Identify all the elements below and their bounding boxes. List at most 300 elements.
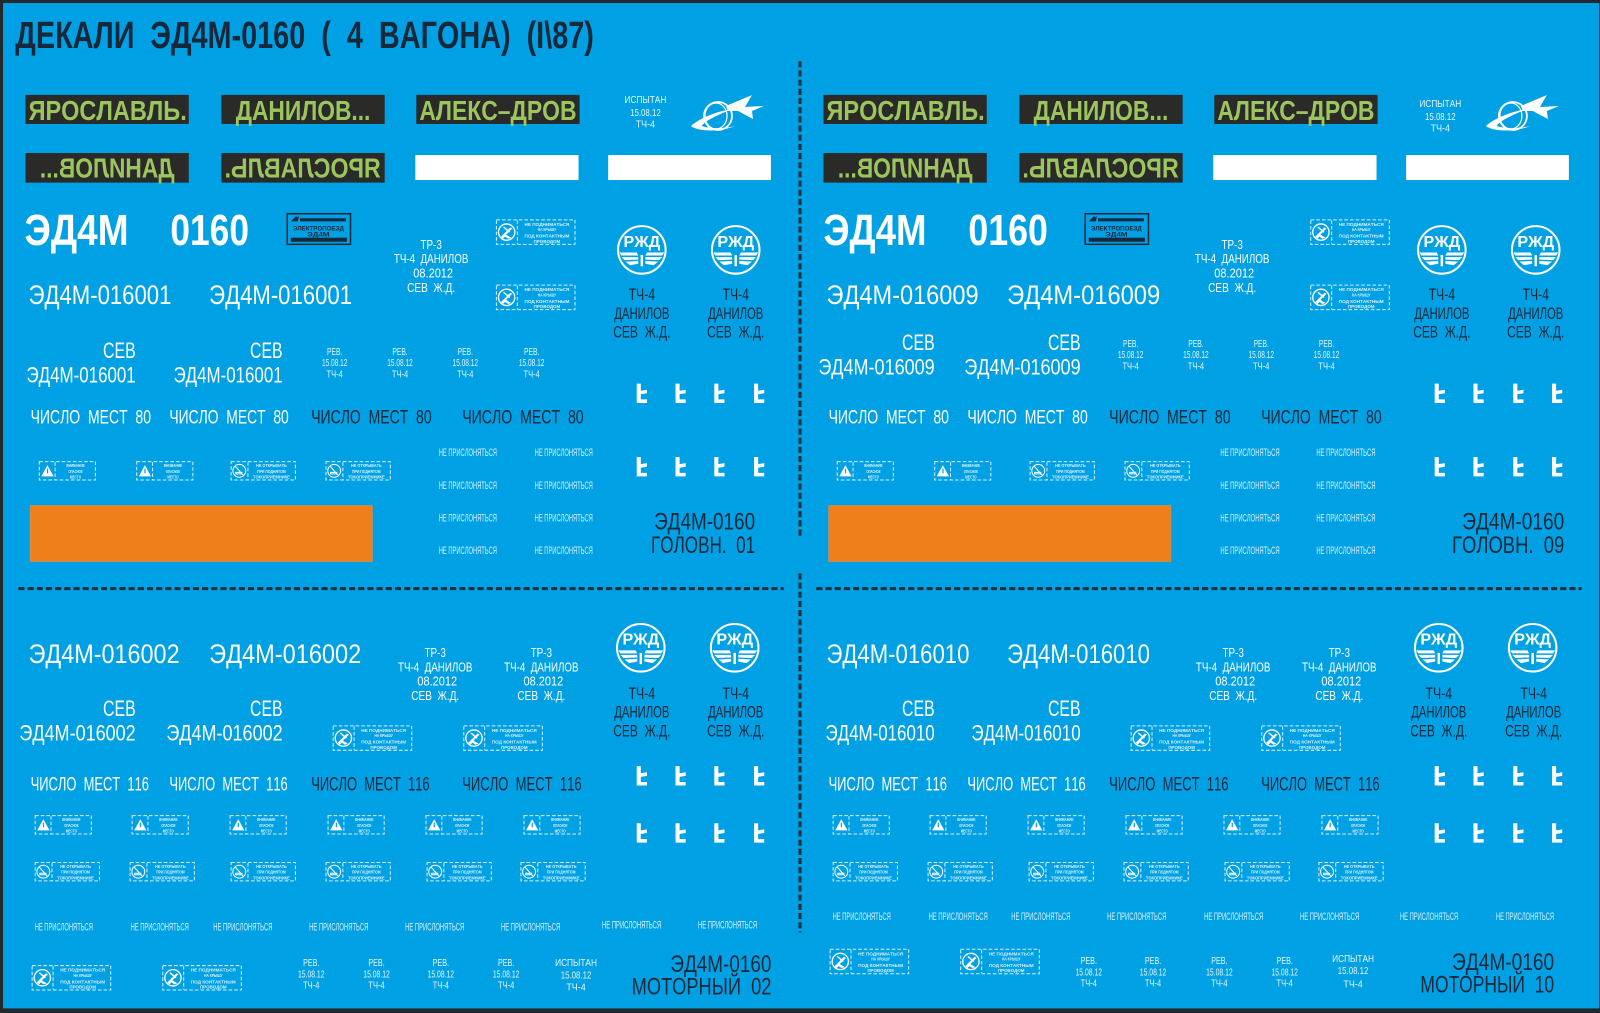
sticker: no climbing	[1311, 285, 1389, 310]
revision stamp: РЕВ.	[433, 958, 449, 969]
sticker: danger: ВНИМАНИЕ	[62, 817, 81, 822]
do-not-lean labels: НЕ ПРИСЛОНЯТЬСЯ	[929, 911, 988, 923]
sticker: danger: ОПАСНОЕ	[866, 469, 881, 474]
car designation: ГОЛОВН. 01	[651, 532, 755, 559]
sticker: no climbing: НЕ ПОДНИМАТЬСЯ	[191, 968, 236, 973]
panel: top-right sheet	[818, 95, 1569, 562]
sticker: no climbing: НА КРЫШУ	[1172, 733, 1191, 738]
sticker: do not open	[833, 863, 897, 881]
repair stamp: 08.2012	[1215, 674, 1255, 689]
sticker: do not open: НЕ ОТКРЫВАТЬ	[1055, 463, 1086, 468]
depot label	[1505, 685, 1562, 741]
do-not-lean labels: НЕ ПРИСЛОНЯТЬСЯ	[1300, 911, 1359, 923]
sticker: do not open	[521, 863, 585, 881]
sticker: danger: ВНИМАНИЕ	[1251, 817, 1269, 822]
sticker: danger: ОПАСНОЕ	[1253, 823, 1267, 828]
do-not-lean labels: НЕ ПРИСЛОНЯТЬСЯ	[213, 921, 272, 933]
sticker: danger: МЕСТО	[961, 828, 972, 833]
railway and car code	[818, 330, 935, 379]
do-not-lean labels: НЕ ПРИСЛОНЯТЬСЯ	[535, 512, 593, 524]
revision stamp: 15.08.12	[1271, 967, 1298, 978]
sticker: danger	[837, 462, 893, 480]
icon: RZD logo	[1512, 226, 1559, 274]
seat count labels	[31, 774, 582, 796]
revision stamp: 15.08.12	[387, 358, 413, 369]
do-not-lean labels	[35, 919, 757, 933]
repair stamp: ТР-3	[1329, 645, 1350, 660]
railway and car code: СЕВ	[250, 338, 283, 363]
depot label: ТЧ-4	[629, 685, 655, 703]
sticker: no climbing: НА КРЫШУ	[538, 227, 556, 232]
seat count labels: ЧИСЛО МЕСТ 116	[311, 774, 430, 796]
do-not-lean labels: НЕ ПРИСЛОНЯТЬСЯ	[131, 921, 189, 933]
sticker: do not open: ТОКОПРИЕМНИКЕ	[1147, 474, 1184, 479]
sticker: danger: ОПАСНОЕ	[553, 823, 567, 828]
revision stamp: ТЧ-4	[498, 981, 515, 992]
sticker: do not open: ТОКОПРИЕМНИКЕ	[348, 474, 385, 479]
sticker: no climbing: ПРОВОДОМ	[1168, 745, 1195, 750]
do-not-lean labels: НЕ ПРИСЛОНЯТЬСЯ	[535, 545, 593, 557]
repair stamp: ТР-3	[420, 237, 442, 252]
depot label	[707, 286, 764, 342]
revision stamp: ТЧ-4	[1253, 361, 1270, 372]
repair stamp: 08.2012	[413, 265, 453, 280]
railway and car code: СЕВ	[902, 696, 935, 721]
icon: RZD logo: РЖД	[1420, 632, 1457, 649]
repair stamp: ТЧ-4 ДАНИЛОВ	[394, 251, 468, 266]
do-not-lean labels: НЕ ПРИСЛОНЯТЬСЯ	[833, 911, 891, 923]
sticker: do not open	[1125, 462, 1189, 480]
sticker: danger	[35, 816, 91, 834]
icon: RZD logo: РЖД	[623, 234, 660, 251]
car designation	[1452, 508, 1564, 559]
destination board: Ярославль: ЯРОСЛАВЛЬ.	[827, 95, 985, 126]
seat count labels: ЧИСЛО МЕСТ 80	[829, 406, 949, 428]
revision stamp: РЕВ.	[1145, 956, 1161, 967]
depot label: ДАНИЛОВ	[614, 305, 669, 323]
railway and car code: ЭД4М-016009	[818, 354, 935, 379]
railway and car code: СЕВ	[103, 338, 136, 363]
sticker: do not open: НЕ ОТКРЫВАТЬ	[1344, 864, 1375, 869]
sticker: no climbing: ПОД КОНТАКТНЫМ	[361, 740, 406, 745]
depot label: СЕВ Ж.Д.	[1505, 723, 1562, 741]
sticker: do not open: НЕ ОТКРЫВАТЬ	[452, 864, 483, 869]
panel: top-left sheet	[24, 95, 771, 562]
sticker: do not open: ПРИ ПОДНЯТОМ	[156, 870, 185, 875]
sticker: danger: ОПАСНОЕ	[166, 469, 180, 474]
sticker: no climbing: НЕ ПОДНИМАТЬСЯ	[1339, 287, 1384, 292]
sticker: do not open: ТОКОПРИЕМНИКЕ	[1052, 474, 1089, 479]
sticker: danger: ВНИМАНИЕ	[355, 817, 373, 822]
sticker: do not open	[326, 462, 390, 480]
revision stamp: РЕВ.	[1254, 339, 1269, 350]
revision stamp: РЕВ.	[1123, 339, 1138, 350]
sticker: do not open: НЕ ОТКРЫВАТЬ	[546, 864, 577, 869]
builder plate: ЭД4М	[307, 232, 330, 239]
do-not-lean labels: НЕ ПРИСЛОНЯТЬСЯ	[439, 480, 497, 492]
car code: ЭД4М-016002	[209, 639, 361, 669]
sticker: danger: ОПАСНОЕ	[357, 823, 371, 828]
icon: RZD logo	[1415, 624, 1463, 672]
car designation: ЭД4М-0160	[654, 508, 755, 535]
depot label: ТЧ-4	[1429, 286, 1455, 304]
repair stamp	[1196, 645, 1271, 703]
sticker: do not open: НЕ ОТКРЫВАТЬ	[256, 864, 287, 869]
seat count labels: ЧИСЛО МЕСТ 116	[1261, 774, 1380, 796]
revision stamp	[493, 958, 520, 992]
sticker: do not open	[130, 863, 194, 881]
revision stamp: 15.08.12	[1183, 350, 1209, 361]
repair stamp: 08.2012	[1321, 674, 1361, 689]
repair stamp: ТР-3	[531, 645, 552, 660]
sticker: no climbing: ПРОВОДОМ	[867, 968, 894, 973]
icon: RZD logo	[1509, 624, 1556, 672]
do-not-lean labels: НЕ ПРИСЛОНЯТЬСЯ	[1204, 911, 1263, 923]
repair stamp	[1302, 645, 1377, 703]
sticker: do not open	[326, 863, 390, 881]
railway and car code	[19, 696, 136, 746]
repair stamp: СЕВ Ж.Д.	[1209, 688, 1257, 703]
sticker: do not open: ПРИ ПОДНЯТОМ	[257, 469, 286, 474]
revision stamp: РЕВ.	[1211, 956, 1228, 967]
sticker: do not open: НЕ ОТКРЫВАТЬ	[351, 864, 382, 869]
do-not-lean labels: НЕ ПРИСЛОНЯТЬСЯ	[1220, 447, 1280, 459]
sticker: danger	[1224, 816, 1280, 834]
railway and car code	[27, 338, 136, 388]
sticker: danger: ВНИМАНИЕ	[66, 463, 85, 468]
revision stamp	[1076, 956, 1102, 989]
revision stamp: РЕВ.	[303, 958, 319, 969]
sticker: no climbing: ПРОВОДОМ	[1348, 304, 1375, 309]
do-not-lean labels: НЕ ПРИСЛОНЯТЬСЯ	[439, 545, 497, 557]
sticker: do not open: ТОКОПРИЕМНИКЕ	[1247, 875, 1284, 880]
sticker: danger: МЕСТО	[555, 828, 566, 833]
sticker: do not open: ПРИ ПОДНЯТОМ	[352, 870, 381, 875]
sticker: do not open	[1030, 462, 1094, 480]
revision stamp: РЕВ.	[368, 958, 385, 969]
seat count labels: ЧИСЛО МЕСТ 80	[31, 406, 151, 428]
seat count labels: ЧИСЛО МЕСТ 80	[1109, 406, 1231, 428]
panel: bottom-left sheet	[19, 624, 771, 1001]
builder plate	[1085, 214, 1148, 244]
car designation: ЭД4М-0160	[670, 951, 771, 978]
sticker: danger	[426, 816, 482, 834]
sticker: do not open: ПРИ ПОДНЯТОМ	[1055, 870, 1084, 875]
do-not-lean labels: НЕ ПРИСЛОНЯТЬСЯ	[1316, 480, 1376, 492]
revision stamp: 15.08.12	[363, 969, 390, 980]
sticker: no climbing	[333, 726, 412, 750]
sticker: danger: МЕСТО	[66, 828, 77, 833]
mirrored board: Данилов: ДАНИЛОВ...	[838, 153, 972, 184]
revision stamp: 15.08.12	[428, 969, 454, 980]
railway and car code	[826, 696, 935, 746]
revision stamp: РЕВ.	[327, 347, 342, 358]
revision stamp: 15.08.12	[298, 969, 325, 980]
sticker: danger: МЕСТО	[868, 474, 879, 479]
revision stamp	[1118, 339, 1144, 372]
sticker: do not open: ТОКОПРИЕМНИКЕ	[449, 875, 486, 880]
do-not-lean labels: НЕ ПРИСЛОНЯТЬСЯ	[698, 919, 757, 931]
revision stamp	[322, 347, 348, 380]
sticker: danger: МЕСТО	[864, 828, 875, 833]
sticker: danger: МЕСТО	[70, 474, 81, 479]
icon: RZD logo: РЖД	[1514, 632, 1551, 649]
repair stamp	[394, 237, 468, 295]
seat count labels: ЧИСЛО МЕСТ 116	[169, 774, 288, 796]
revision stamp	[298, 958, 325, 992]
destination board: Ярославль: ЯРОСЛАВЛЬ.	[29, 95, 187, 126]
tested stamp: ИСПЫТАН	[1419, 99, 1461, 110]
revision stamp	[453, 347, 478, 380]
sticker: no climbing	[1311, 220, 1389, 244]
sticker: no climbing: НА КРЫШУ	[538, 292, 556, 297]
depot label: СЕВ Ж.Д.	[613, 723, 670, 741]
sticker: danger	[137, 462, 193, 480]
icon: RZD logo: РЖД	[1423, 234, 1460, 251]
tested stamp: ТЧ-4	[566, 983, 586, 994]
sticker: no climbing: ПРОВОДОМ	[998, 968, 1025, 973]
revision stamp: ТЧ-4	[1145, 978, 1161, 989]
seat count labels: ЧИСЛО МЕСТ 80	[311, 406, 432, 428]
seat count labels: ЧИСЛО МЕСТ 116	[462, 774, 582, 796]
revision stamp	[1183, 339, 1209, 372]
tested stamp: ИСПЫТАН	[555, 958, 597, 969]
revision stamp: РЕВ.	[524, 347, 539, 358]
sticker: no climbing: НЕ ПОДНИМАТЬСЯ	[361, 728, 407, 733]
sticker: do not open: ПРИ ПОДНЯТОМ	[453, 870, 482, 875]
builder plate: ЭЛЕКТРОПОЕЗД	[1091, 226, 1142, 233]
do-not-lean labels: НЕ ПРИСЛОНЯТЬСЯ	[1316, 512, 1376, 524]
sticker: danger	[230, 816, 286, 834]
depot label	[707, 685, 764, 741]
revision stamp: ТЧ-4	[457, 369, 474, 380]
sticker: no climbing: НЕ ПОДНИМАТЬСЯ	[1339, 222, 1384, 227]
sticker: no climbing: ПОД КОНТАКТНЫМ	[524, 299, 569, 304]
revision stamp	[1140, 956, 1167, 989]
sticker: no climbing: НА КРЫШУ	[871, 956, 890, 961]
revision stamp	[1248, 339, 1274, 372]
sticker: danger: ОПАСНОЕ	[64, 823, 79, 828]
sticker: no climbing	[32, 966, 111, 990]
icon: RZD logo	[1418, 226, 1466, 274]
do-not-lean labels: НЕ ПРИСЛОНЯТЬСЯ	[501, 921, 560, 933]
sticker: do not open: НЕ ОТКРЫВАТЬ	[1054, 864, 1085, 869]
builder plate: ЭЛЕКТРОПОЕЗД	[293, 226, 345, 233]
icon group: door marks	[637, 384, 764, 476]
destination board: Алекс-Дров: АЛЕКС–ДРОВ	[419, 95, 577, 126]
sticker: no climbing: ПРОВОДОМ	[370, 745, 397, 750]
revision stamp: РЕВ.	[458, 347, 473, 358]
sticker: danger: МЕСТО	[359, 828, 370, 833]
sticker: danger: ОПАСНОЕ	[68, 469, 83, 474]
do-not-lean labels: НЕ ПРИСЛОНЯТЬСЯ	[1011, 911, 1070, 923]
car code: ЭД4М-016009	[1007, 280, 1160, 310]
railway and car code: ЭД4М-016010	[826, 721, 935, 746]
sticker: do not open	[35, 863, 99, 881]
repair stamp: ТЧ-4 ДАНИЛОВ	[504, 659, 579, 674]
railway and car code: ЭД4М-016001	[173, 363, 283, 388]
sticker: no climbing: НЕ ПОДНИМАТЬСЯ	[1159, 728, 1205, 733]
sticker: no climbing	[1262, 726, 1340, 750]
do-not-lean labels: НЕ ПРИСЛОНЯТЬСЯ	[1107, 911, 1166, 923]
icon: RZD logo	[618, 226, 666, 274]
sticker: danger: МЕСТО	[1059, 828, 1070, 833]
seat count labels	[31, 406, 584, 428]
car series: ЭД4М	[24, 206, 129, 255]
blank white board	[415, 155, 579, 180]
car series: ЭД4М	[823, 206, 927, 255]
revision stamp: 15.08.12	[1140, 967, 1167, 978]
car designation: ЭД4М-0160	[1462, 508, 1564, 535]
do-not-lean labels: НЕ ПРИСЛОНЯТЬСЯ	[405, 921, 464, 933]
do-not-lean labels: НЕ ПРИСЛОНЯТЬСЯ	[1220, 480, 1280, 492]
repair stamp: ТЧ-4 ДАНИЛОВ	[1195, 251, 1270, 266]
railway and car code: ЭД4М-016001	[27, 363, 136, 388]
sticker: danger: МЕСТО	[1157, 828, 1168, 833]
depot label: ДАНИЛОВ	[708, 305, 763, 323]
blank white board	[608, 155, 771, 180]
car number: 0160	[968, 206, 1048, 255]
depot label: ДАНИЛОВ	[1414, 305, 1469, 323]
do-not-lean labels: НЕ ПРИСЛОНЯТЬСЯ	[535, 480, 593, 492]
sticker: no climbing: НЕ ПОДНИМАТЬСЯ	[858, 951, 904, 956]
seat count labels: ЧИСЛО МЕСТ 116	[829, 774, 947, 796]
revision stamp: 15.08.12	[493, 969, 520, 980]
sticker: danger: ОПАСНОЕ	[1057, 823, 1071, 828]
sticker: no climbing	[961, 949, 1039, 974]
repair stamp: СЕВ Ж.Д.	[407, 280, 455, 295]
sticker: do not open: НЕ ОТКРЫВАТЬ	[60, 864, 91, 869]
builder plate: ЭД4М	[1105, 232, 1128, 239]
sticker: no climbing: ПОД КОНТАКТНЫМ	[989, 963, 1034, 968]
sticker: danger: МЕСТО	[457, 828, 468, 833]
icon group: door marks	[1435, 766, 1562, 843]
revision stamp: 15.08.12	[1076, 967, 1102, 978]
blank white board	[1213, 155, 1377, 180]
seat count labels: ЧИСЛО МЕСТ 116	[967, 774, 1086, 796]
revision stamp: РЕВ.	[1081, 956, 1097, 967]
sticker: no climbing	[496, 285, 575, 310]
sticker: danger	[132, 816, 188, 834]
sticker: danger: ВНИМАНИЕ	[551, 817, 569, 822]
icon: RZD logo: РЖД	[1517, 234, 1554, 251]
car code: ЭД4М-016001	[209, 280, 352, 310]
depot label: ТЧ-4	[722, 286, 749, 304]
do-not-lean labels	[833, 911, 1554, 923]
sticker: no climbing: ПОД КОНТАКТНЫМ	[1339, 234, 1384, 239]
revision stamp: ТЧ-4	[523, 369, 540, 380]
sticker: danger: ОПАСНОЕ	[862, 823, 877, 828]
depot label: СЕВ Ж.Д.	[707, 723, 764, 741]
sticker: do not open: ТОКОПРИЕМНИКЕ	[543, 875, 580, 880]
sticker: no climbing	[1131, 726, 1210, 750]
revision stamp: РЕВ.	[392, 347, 408, 358]
sticker: do not open: ПРИ ПОДНЯТОМ	[954, 870, 983, 875]
car designation	[651, 508, 755, 559]
sticker: do not open: ПРИ ПОДНЯТОМ	[1251, 870, 1280, 875]
sticker: do not open: ТОКОПРИЕМНИКЕ	[348, 875, 385, 880]
railway and car code: СЕВ	[902, 330, 935, 355]
sticker: danger	[1322, 816, 1378, 834]
sticker: danger	[1126, 816, 1182, 834]
sticker: danger	[328, 816, 384, 834]
revision stamp	[1314, 339, 1340, 372]
depot label	[1410, 685, 1467, 741]
railway and car code: СЕВ	[103, 696, 136, 721]
sticker: do not open: ТОКОПРИЕМНИКЕ	[1341, 875, 1378, 880]
car designation	[1420, 949, 1554, 999]
repair stamp: ТР-3	[424, 645, 446, 660]
do-not-lean labels: НЕ ПРИСЛОНЯТЬСЯ	[1220, 512, 1280, 524]
do-not-lean labels: НЕ ПРИСЛОНЯТЬСЯ	[439, 512, 497, 524]
depot label: СЕВ Ж.Д.	[613, 324, 670, 342]
sticker: danger: ВНИМАНИЕ	[860, 817, 879, 822]
depot label: СЕВ Ж.Д.	[1413, 324, 1470, 342]
destination board: Алекс-Дров: АЛЕКС–ДРОВ	[1217, 95, 1374, 126]
revision stamp: 15.08.12	[322, 358, 348, 369]
sticker: danger: ВНИМАНИЕ	[1153, 817, 1171, 822]
repair stamp: 08.2012	[1214, 265, 1254, 280]
revision stamp: ТЧ-4	[1211, 978, 1228, 989]
do-not-lean labels: НЕ ПРИСЛОНЯТЬСЯ	[309, 921, 368, 933]
sticker: do not open: НЕ ОТКРЫВАТЬ	[256, 463, 287, 468]
sticker: danger: ОПАСНОЕ	[455, 823, 469, 828]
do-not-lean labels: НЕ ПРИСЛОНЯТЬСЯ	[1220, 545, 1280, 557]
railway and car code	[166, 696, 283, 746]
sticker: danger: ВНИМАНИЕ	[962, 463, 980, 468]
sticker: danger: ОПАСНОЕ	[959, 823, 973, 828]
mirrored board: Ярославль: ЯРОСЛАВЛЬ.	[1022, 153, 1179, 184]
sticker: no climbing: НЕ ПОДНИМАТЬСЯ	[524, 222, 570, 227]
sticker: do not open	[928, 863, 992, 881]
repair stamp: СЕВ Ж.Д.	[411, 688, 459, 703]
tested stamp	[1419, 99, 1461, 135]
repair stamp: ТЧ-4 ДАНИЛОВ	[1302, 659, 1377, 674]
sticker: do not open: ПРИ ПОДНЯТОМ	[859, 870, 888, 875]
depot label: ТЧ-4	[1426, 685, 1452, 703]
repair stamp: 08.2012	[417, 674, 457, 689]
tested stamp	[1332, 954, 1374, 990]
do-not-lean labels: НЕ ПРИСЛОНЯТЬСЯ	[602, 919, 661, 931]
car code: ЭД4М-016001	[29, 280, 171, 310]
revision stamp	[363, 958, 390, 992]
icon group: door marks	[1435, 384, 1562, 476]
car code: ЭД4М-016010	[1007, 639, 1150, 669]
sticker: do not open	[231, 462, 295, 480]
sticker: do not open: НЕ ОТКРЫВАТЬ	[858, 864, 889, 869]
sticker: do not open: ТОКОПРИЕМНИКЕ	[253, 474, 290, 479]
revision stamp	[1271, 956, 1298, 989]
sticker: danger: ВНИМАНИЕ	[957, 817, 976, 822]
car designation: МОТОРНЫЙ 02	[632, 973, 771, 1001]
panel: bottom-right sheet	[826, 624, 1562, 999]
do-not-lean labels: НЕ ПРИСЛОНЯТЬСЯ	[1316, 447, 1376, 459]
sticker: danger: МЕСТО	[1255, 828, 1266, 833]
sticker: do not open: ТОКОПРИЕМНИКЕ	[57, 875, 94, 880]
destination board: Данилов: ДАНИЛОВ...	[1034, 95, 1168, 126]
depot label: ДАНИЛОВ	[614, 704, 669, 722]
icon group: door marks	[637, 766, 764, 843]
sticker: do not open: НЕ ОТКРЫВАТЬ	[351, 463, 382, 468]
repair stamp	[1195, 237, 1270, 295]
repair stamp: 08.2012	[523, 674, 563, 689]
revision stamp: ТЧ-4	[368, 981, 385, 992]
sticker: danger: МЕСТО	[1353, 828, 1364, 833]
depot label: ТЧ-4	[1520, 685, 1547, 703]
seat count labels: ЧИСЛО МЕСТ 80	[169, 406, 289, 428]
sticker: danger	[524, 816, 580, 834]
revision stamp: 15.08.12	[1314, 350, 1340, 361]
